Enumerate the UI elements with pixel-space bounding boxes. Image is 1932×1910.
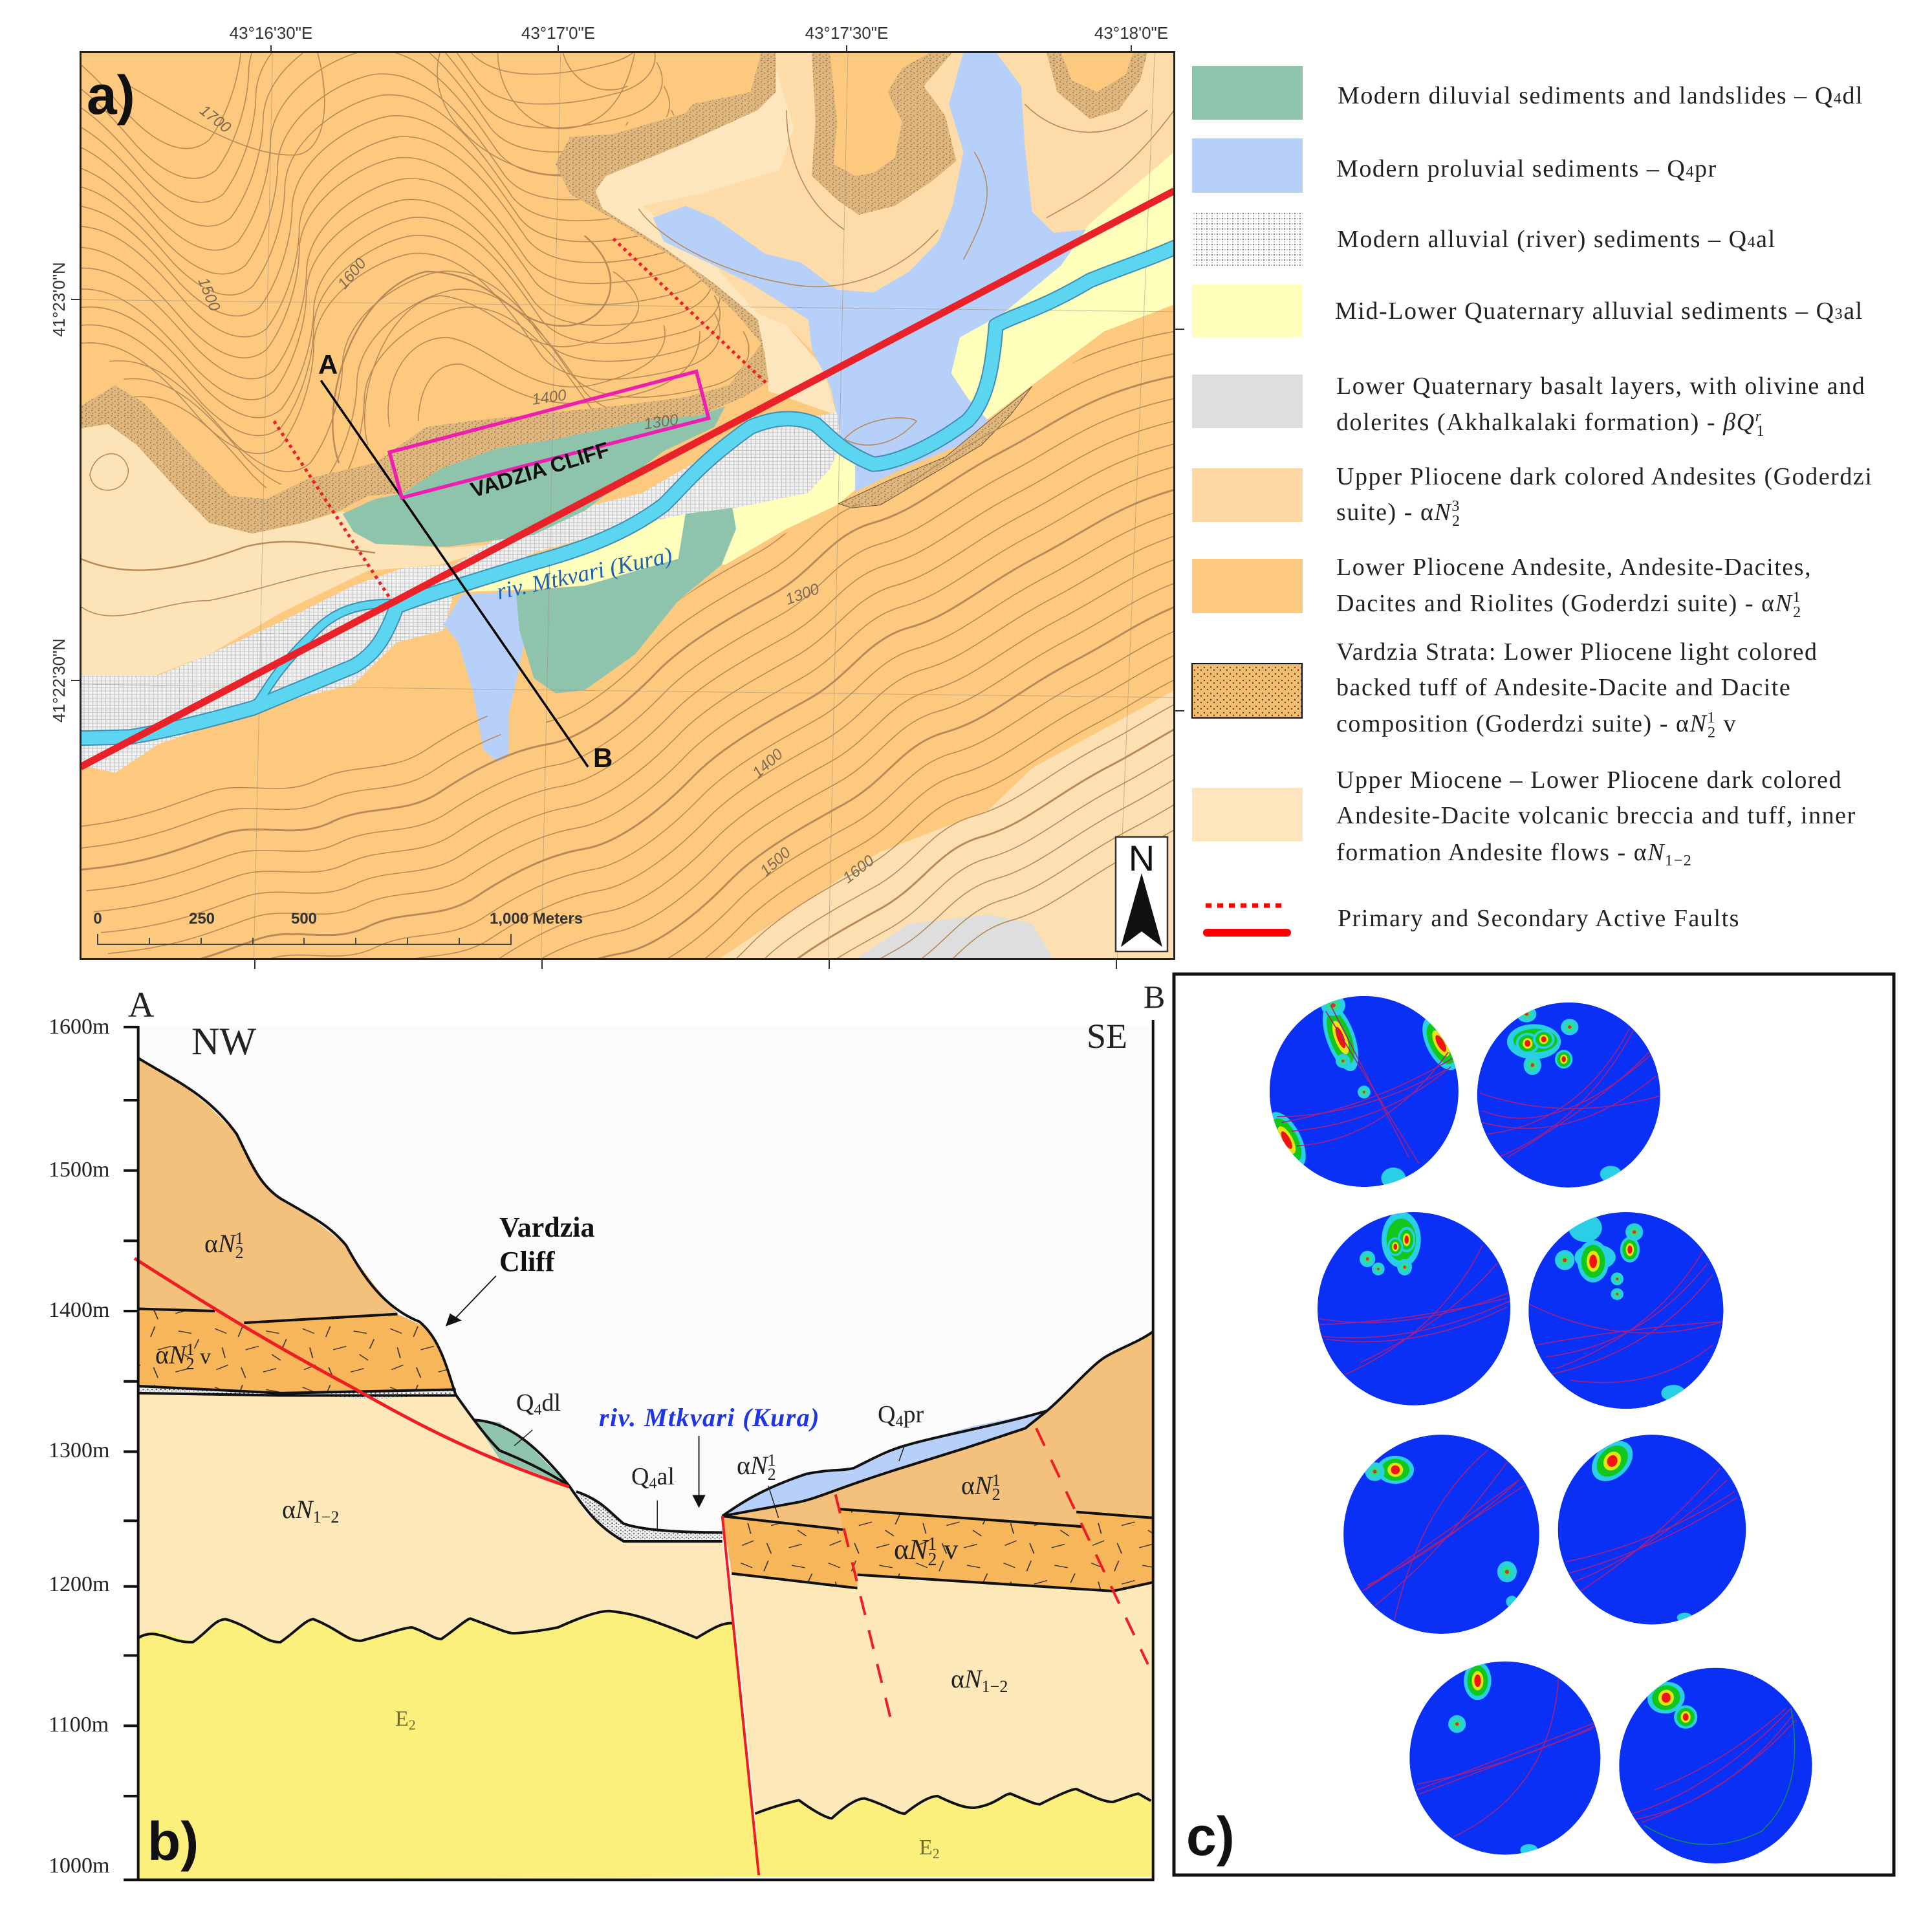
swatch and label: lower pliocene: 2 [1793,604,1802,621]
formation labels: 1 [768,1451,776,1470]
formation labels: αN [894,1534,928,1565]
contour labels: 1400 [531,386,568,409]
grid lines [81,52,1174,959]
contour labels: 1600 [334,255,370,292]
terrain and layer lines [138,1058,1153,1818]
swatch and label: alluvial [1192,212,1776,266]
swatch and label: lower pliocene: 1 [1793,589,1801,606]
formation labels: v [937,1534,958,1565]
formation labels: 1−2 [982,1677,1008,1696]
formation labels: 1 [928,1534,937,1554]
axes [124,1020,1153,1880]
elevation labels: 1000m [49,1854,109,1878]
section end and direction labels: NW [191,1020,256,1063]
swatch and label: upper miocene: formation Andesite flows - αN [1336,839,1665,866]
stereonet 3 [1318,1211,1510,1405]
scale bar: 1,000 Meters [490,910,583,928]
formation labels: v [195,1345,211,1369]
swatch and label: Vardzia strata: Vardzia Strata: Lower Pliocene light colored [1336,638,1818,666]
swatch and label: basalt: 1 [1757,423,1765,440]
latitude labels: 41°22'30"N [49,638,69,722]
red faults [135,1259,1148,1875]
formation labels: αN [951,1664,982,1693]
contour lines [81,53,1173,958]
swatch and label: upper pliocene: suite) - αN [1336,499,1451,526]
section end and direction labels [128,979,1165,1063]
formation labels: 2 [409,1717,416,1733]
section drawing [124,1020,1153,1880]
formation labels: 2 [992,1485,1001,1504]
longitude labels: 43°18'0"E [1094,23,1168,43]
point B: B [593,743,613,773]
swatch and label: alluvial: Modern alluvial (river) sediments – Q4al [1337,226,1776,253]
swatch and label: Vardzia strata: 1 [1707,710,1716,726]
swatch and label: diluvial [1192,66,1863,120]
swatch and label: lower pliocene [1192,554,1812,621]
formation labels: 1−2 [313,1508,339,1526]
leader lines [514,1430,905,1530]
formation labels: 2 [933,1845,940,1861]
swatch and label: Vardzia strata: 2 [1708,724,1717,741]
formation labels: 4 [534,1402,541,1418]
elevation labels: 1200m [49,1572,109,1596]
cliff arrow [446,1276,496,1327]
map frame ticks [71,45,1184,969]
stereonet 8 [1619,1668,1812,1863]
formation labels [155,1229,1008,1861]
stereonet plots [1260,995,1812,1863]
stereonet 1 [1260,995,1467,1189]
swatch and label: upper miocene: 1−2 [1665,852,1692,869]
point A: A [318,349,338,380]
section end and direction labels: B [1144,979,1165,1015]
contour labels [194,102,878,887]
swatch and label: upper miocene: Andesite-Dacite volcanic breccia and tuff, inner [1336,802,1856,829]
legend [1192,66,1872,933]
swatch and label: upper pliocene: Upper Pliocene dark colored Andesites (Goderdzi [1336,463,1872,490]
swatch and label: Vardzia strata: backed tuff of Andesite-Dacite and Dacite [1336,674,1791,701]
formation labels: αN [737,1451,768,1480]
panel a: geological map [53,27,1184,969]
swatch and label: upper miocene: Upper Miocene – Lower Pliocene dark colored [1336,766,1842,794]
panel letter c: c) [1186,1806,1235,1867]
formation labels: Q [878,1401,895,1428]
formation labels: al [657,1463,675,1490]
formation labels: 2 [928,1550,937,1570]
section end and direction labels: A [128,985,155,1025]
Vardzia cliff box [389,371,709,497]
contour labels: 1500 [757,843,794,880]
swatch and label: mid-lower quaternary: Mid-Lower Quaternary alluvial sediments – Q3al [1335,298,1863,325]
formation labels: Q [631,1463,649,1490]
formation labels: αN [282,1495,313,1524]
elevation labels: 1300m [49,1438,109,1462]
swatch and label: basalt: r [1755,408,1763,425]
elevation labels: 1500m [49,1158,109,1182]
map frame [80,52,1175,959]
primary fault [81,191,1174,767]
scale bar: 0 [93,910,102,928]
Vardzia Cliff callout [499,1211,595,1277]
swatch and label: proluvial: Modern proluvial sediments – Q4pr [1336,155,1717,182]
panel letter a: a) [87,65,135,125]
Vadzia Cliff label: VADZIA CLIFF [468,437,612,502]
panel b: cross section [49,979,1165,1880]
longitude labels: 43°16'30"E [230,23,312,43]
swatch and label: mid-lower quaternary [1192,285,1863,338]
swatch and label: lower pliocene: Dacites and Riolites (Goderdzi suite) - αN [1336,590,1793,617]
swatch and label: basalt: Lower Quaternary basalt layers, with olivine and [1336,373,1865,400]
swatch and label: upper pliocene: 2 [1452,513,1461,530]
river label: riv. Mtkvari (Kura) [494,542,675,605]
river [81,248,1174,738]
formation labels: Q [516,1389,534,1416]
section line A-B [321,380,588,767]
river arrow [692,1436,706,1508]
contour labels: 1300 [643,411,680,433]
swatch and label: upper pliocene [1192,463,1872,530]
formation labels: 2 [768,1465,776,1484]
formation labels: 4 [895,1413,903,1430]
swatch and label: Vardzia strata [1192,638,1818,741]
contour labels: 1500 [194,275,224,314]
formation labels: pr [903,1401,924,1428]
swatch and label: Vardzia strata: v [1717,710,1737,737]
river label in section: riv. Mtkvari (Kura) [599,1403,820,1432]
longitude labels [230,23,1168,43]
elevation labels: 1400m [49,1298,109,1322]
Vardzia Cliff callout: Cliff [499,1246,556,1277]
contour labels: 1700 [196,102,234,137]
latitude labels [49,262,69,722]
stereonet 6 [1558,1433,1746,1625]
formation labels: αN [961,1471,992,1500]
swatch and label: lower pliocene: Lower Pliocene Andesite, Andesite-Dacites, [1336,554,1812,581]
formation labels: αN [204,1229,235,1258]
formation labels: 2 [186,1354,195,1373]
swatch and label: basalt [1192,373,1865,440]
formation labels: 2 [235,1243,244,1262]
north arrow [1116,837,1167,951]
contour labels: 1300 [783,580,822,609]
swatch and label: faults: Primary and Secondary Active Faults [1338,905,1740,932]
Vardzia Cliff callout: Vardzia [499,1211,595,1243]
stereonet 4 [1528,1212,1723,1409]
stereonet 7 [1409,1662,1600,1856]
formation labels: 1 [186,1340,195,1359]
north arrow: N [1129,838,1155,878]
elevation labels [49,1015,109,1878]
formation labels: E [395,1707,409,1731]
swatch and label: upper miocene [1192,766,1856,869]
secondary faults [274,239,768,598]
swatch and label: basalt: dolerites (Akhalkalaki formation) - βQ [1336,409,1755,436]
formation labels: 4 [649,1475,657,1492]
section end and direction labels: SE [1087,1017,1127,1056]
formation labels: αN [155,1340,186,1369]
longitude labels: 43°17'0"E [521,23,595,43]
formation labels: 1 [235,1229,244,1248]
formation labels: 1 [992,1471,1001,1490]
scale bar [93,910,583,944]
longitude labels: 43°17'30"E [805,23,888,43]
swatch and label: Vardzia strata: composition (Goderdzi suite) - αN [1336,710,1707,737]
scale bar: 500 [291,910,317,928]
contour labels: 1600 [840,852,878,887]
panel letter b: b) [147,1811,199,1872]
elevation labels: 1100m [49,1713,109,1737]
frame [1174,974,1894,1875]
map body [81,53,1173,958]
scale bar: 250 [189,910,215,928]
swatch and label: proluvial [1192,138,1717,193]
panel c: stereonets [1174,974,1894,1875]
swatch and label: upper pliocene: 3 [1451,498,1460,515]
stereonet 2 [1477,1003,1660,1188]
formation labels: E [919,1836,933,1860]
stereonet 5 [1343,1435,1539,1634]
swatch and label: diluvial: Modern diluvial sediments and landslides – Q4dl [1338,82,1863,109]
latitude labels: 41°23'0"N [49,262,69,337]
formation labels: dl [541,1389,561,1416]
elevation labels: 1600m [49,1015,109,1039]
contour labels: 1400 [749,745,787,781]
